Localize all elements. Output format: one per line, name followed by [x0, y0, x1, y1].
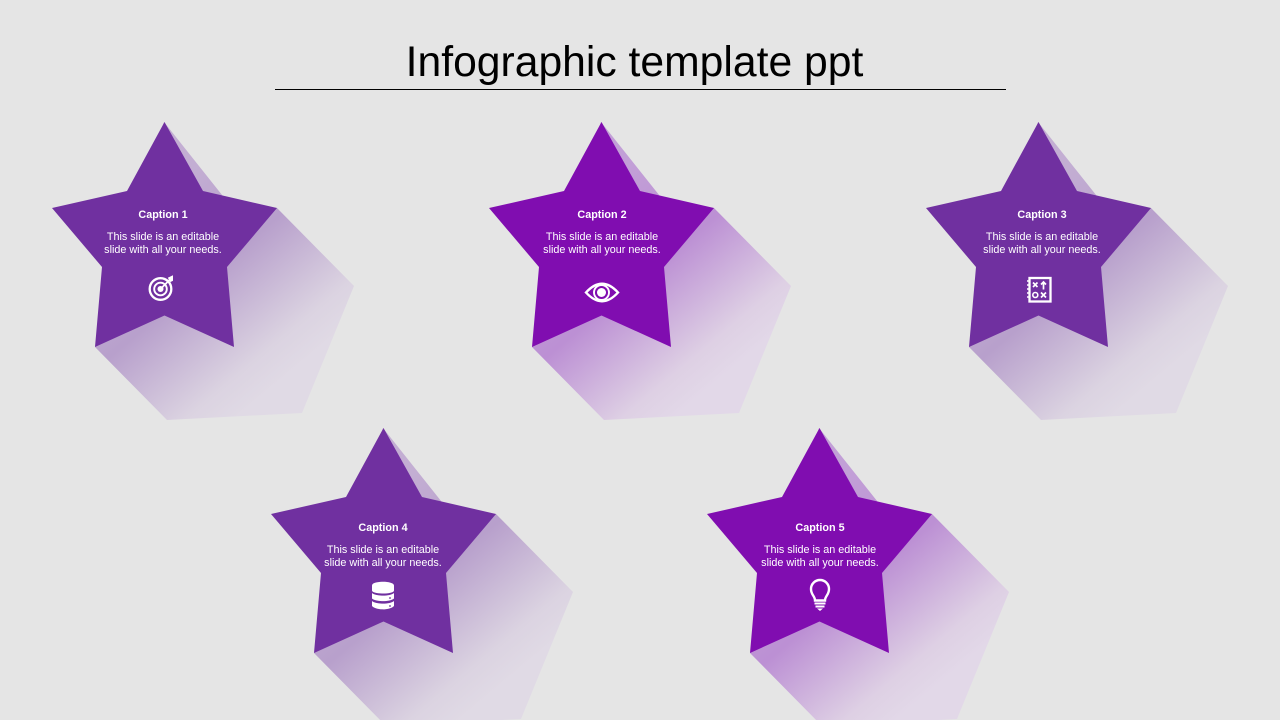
caption heading 2: Caption 2 [577, 209, 627, 221]
icon: eye [586, 284, 618, 301]
caption heading 3: Caption 3 [1017, 209, 1067, 221]
caption text 4: This slide is an editable [327, 544, 439, 556]
pentagon shadow 2 [532, 122, 791, 420]
pentagon shadow 1 [95, 122, 354, 420]
pentagon shadow 4 [314, 428, 573, 720]
pentagon shadow 5 [750, 428, 1009, 720]
star 2 [489, 122, 714, 347]
panel: caption 2 [489, 122, 791, 420]
caption heading 4: Caption 4 [358, 522, 408, 534]
pentagon shadow 3 [969, 122, 1228, 420]
icon: database [372, 582, 394, 609]
caption text 2: slide with all your needs. [543, 244, 661, 256]
panel: caption 4 [271, 428, 573, 720]
caption text 3: This slide is an editable [986, 231, 1098, 243]
star 5 [707, 428, 932, 653]
panel: caption 3 [926, 122, 1228, 420]
caption text 3: slide with all your needs. [983, 244, 1101, 256]
caption heading 1: Caption 1 [138, 209, 188, 221]
icon: light bulb [811, 580, 829, 611]
caption text 5: slide with all your needs. [761, 557, 879, 569]
caption text 1: This slide is an editable [107, 231, 219, 243]
star 1 [52, 122, 277, 347]
icon: playbook [1027, 278, 1050, 302]
panel: caption 5 [707, 428, 1009, 720]
caption text 2: This slide is an editable [546, 231, 658, 243]
star 4 [271, 428, 496, 653]
star 3 [926, 122, 1151, 347]
caption text 5: This slide is an editable [764, 544, 876, 556]
icon: target [150, 276, 172, 300]
title: Infographic template ppt [406, 38, 863, 86]
caption text 4: slide with all your needs. [324, 557, 442, 569]
panel: caption 1 [52, 122, 354, 420]
caption heading 5: Caption 5 [795, 522, 845, 534]
caption text 1: slide with all your needs. [104, 244, 222, 256]
